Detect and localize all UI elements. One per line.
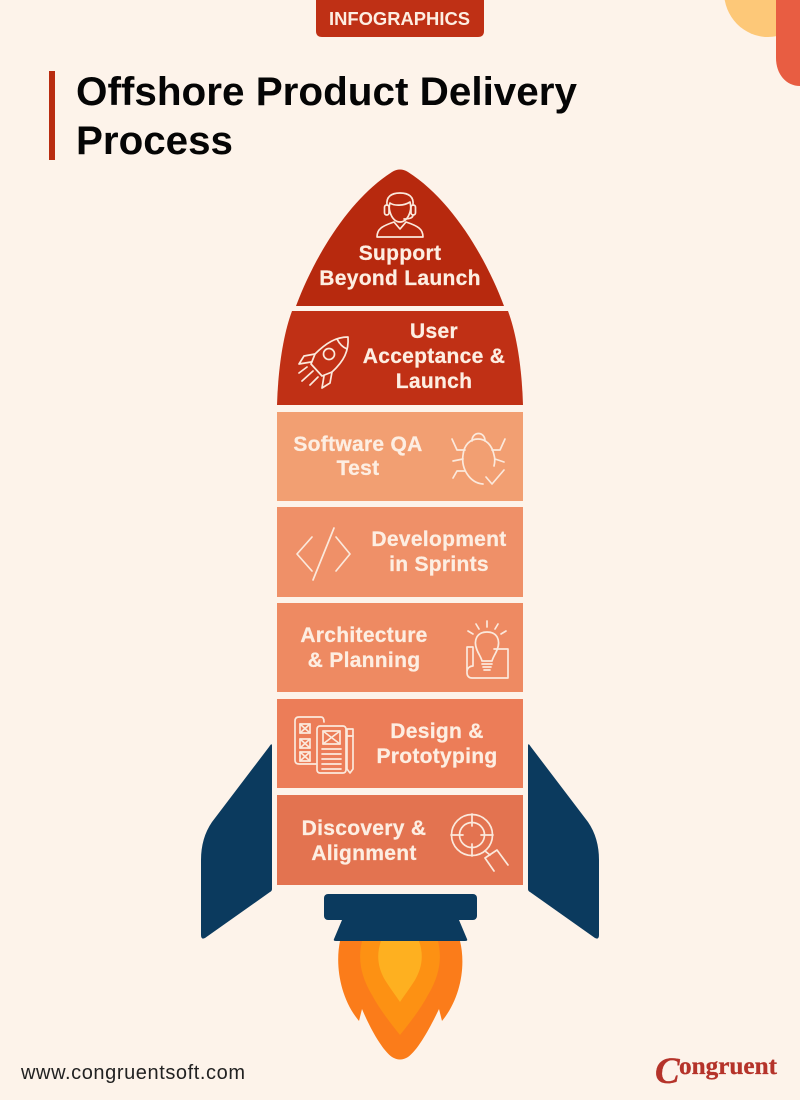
section: user acceptance and launch: User	[410, 320, 458, 343]
section: discovery and alignment	[277, 795, 523, 885]
section: development in sprints: Development	[371, 528, 507, 551]
left fin	[201, 744, 272, 939]
engine	[324, 894, 477, 941]
right fin	[528, 744, 599, 939]
section: user acceptance and launch: Launch	[396, 370, 472, 393]
logo: congruent: ongruent	[679, 1053, 778, 1080]
icon: bug with check	[452, 434, 505, 484]
icon: support agent headset	[377, 193, 423, 237]
section: software QA test: Software QA	[293, 433, 423, 456]
badge: infographics: INFOGRAPHICS	[329, 9, 470, 29]
icon: rocket	[299, 337, 348, 388]
title	[49, 70, 578, 163]
section: software QA test: Test	[337, 457, 379, 480]
section: architecture and planning: Architecture	[300, 624, 428, 647]
section: design and prototyping: Design &	[390, 720, 484, 743]
title: Offshore Product Delivery	[76, 70, 578, 114]
logo: congruent	[655, 1051, 778, 1092]
section: user acceptance and launch: Acceptance &	[363, 345, 505, 368]
section: architecture and planning	[277, 603, 523, 692]
rocket nose: support beyond launch	[296, 170, 504, 306]
icon: wireframe documents	[295, 717, 353, 773]
icon: code brackets	[297, 528, 350, 580]
section: development in sprints	[277, 507, 523, 597]
section: discovery and alignment: Alignment	[311, 842, 417, 865]
icon: magnifier target	[451, 814, 508, 871]
section: design and prototyping: Prototyping	[376, 745, 498, 768]
flame	[338, 941, 462, 1060]
section: development in sprints: in Sprints	[389, 553, 489, 576]
rocket nose: support beyond launch: Support	[359, 242, 441, 265]
decorative corner shapes	[724, 0, 800, 86]
badge: infographics	[316, 0, 484, 37]
section: design and prototyping	[277, 699, 523, 788]
icon: blueprint with light bulb	[467, 621, 508, 678]
website url: www.congruentsoft.com	[20, 1062, 245, 1084]
section: software QA test	[277, 412, 523, 501]
title: Process	[76, 119, 233, 163]
section: architecture and planning: & Planning	[308, 649, 420, 672]
section: discovery and alignment: Discovery &	[302, 817, 426, 840]
section: user acceptance and launch	[277, 311, 523, 405]
logo: congruent: C	[655, 1051, 681, 1092]
rocket nose: support beyond launch: Beyond Launch	[319, 267, 481, 290]
